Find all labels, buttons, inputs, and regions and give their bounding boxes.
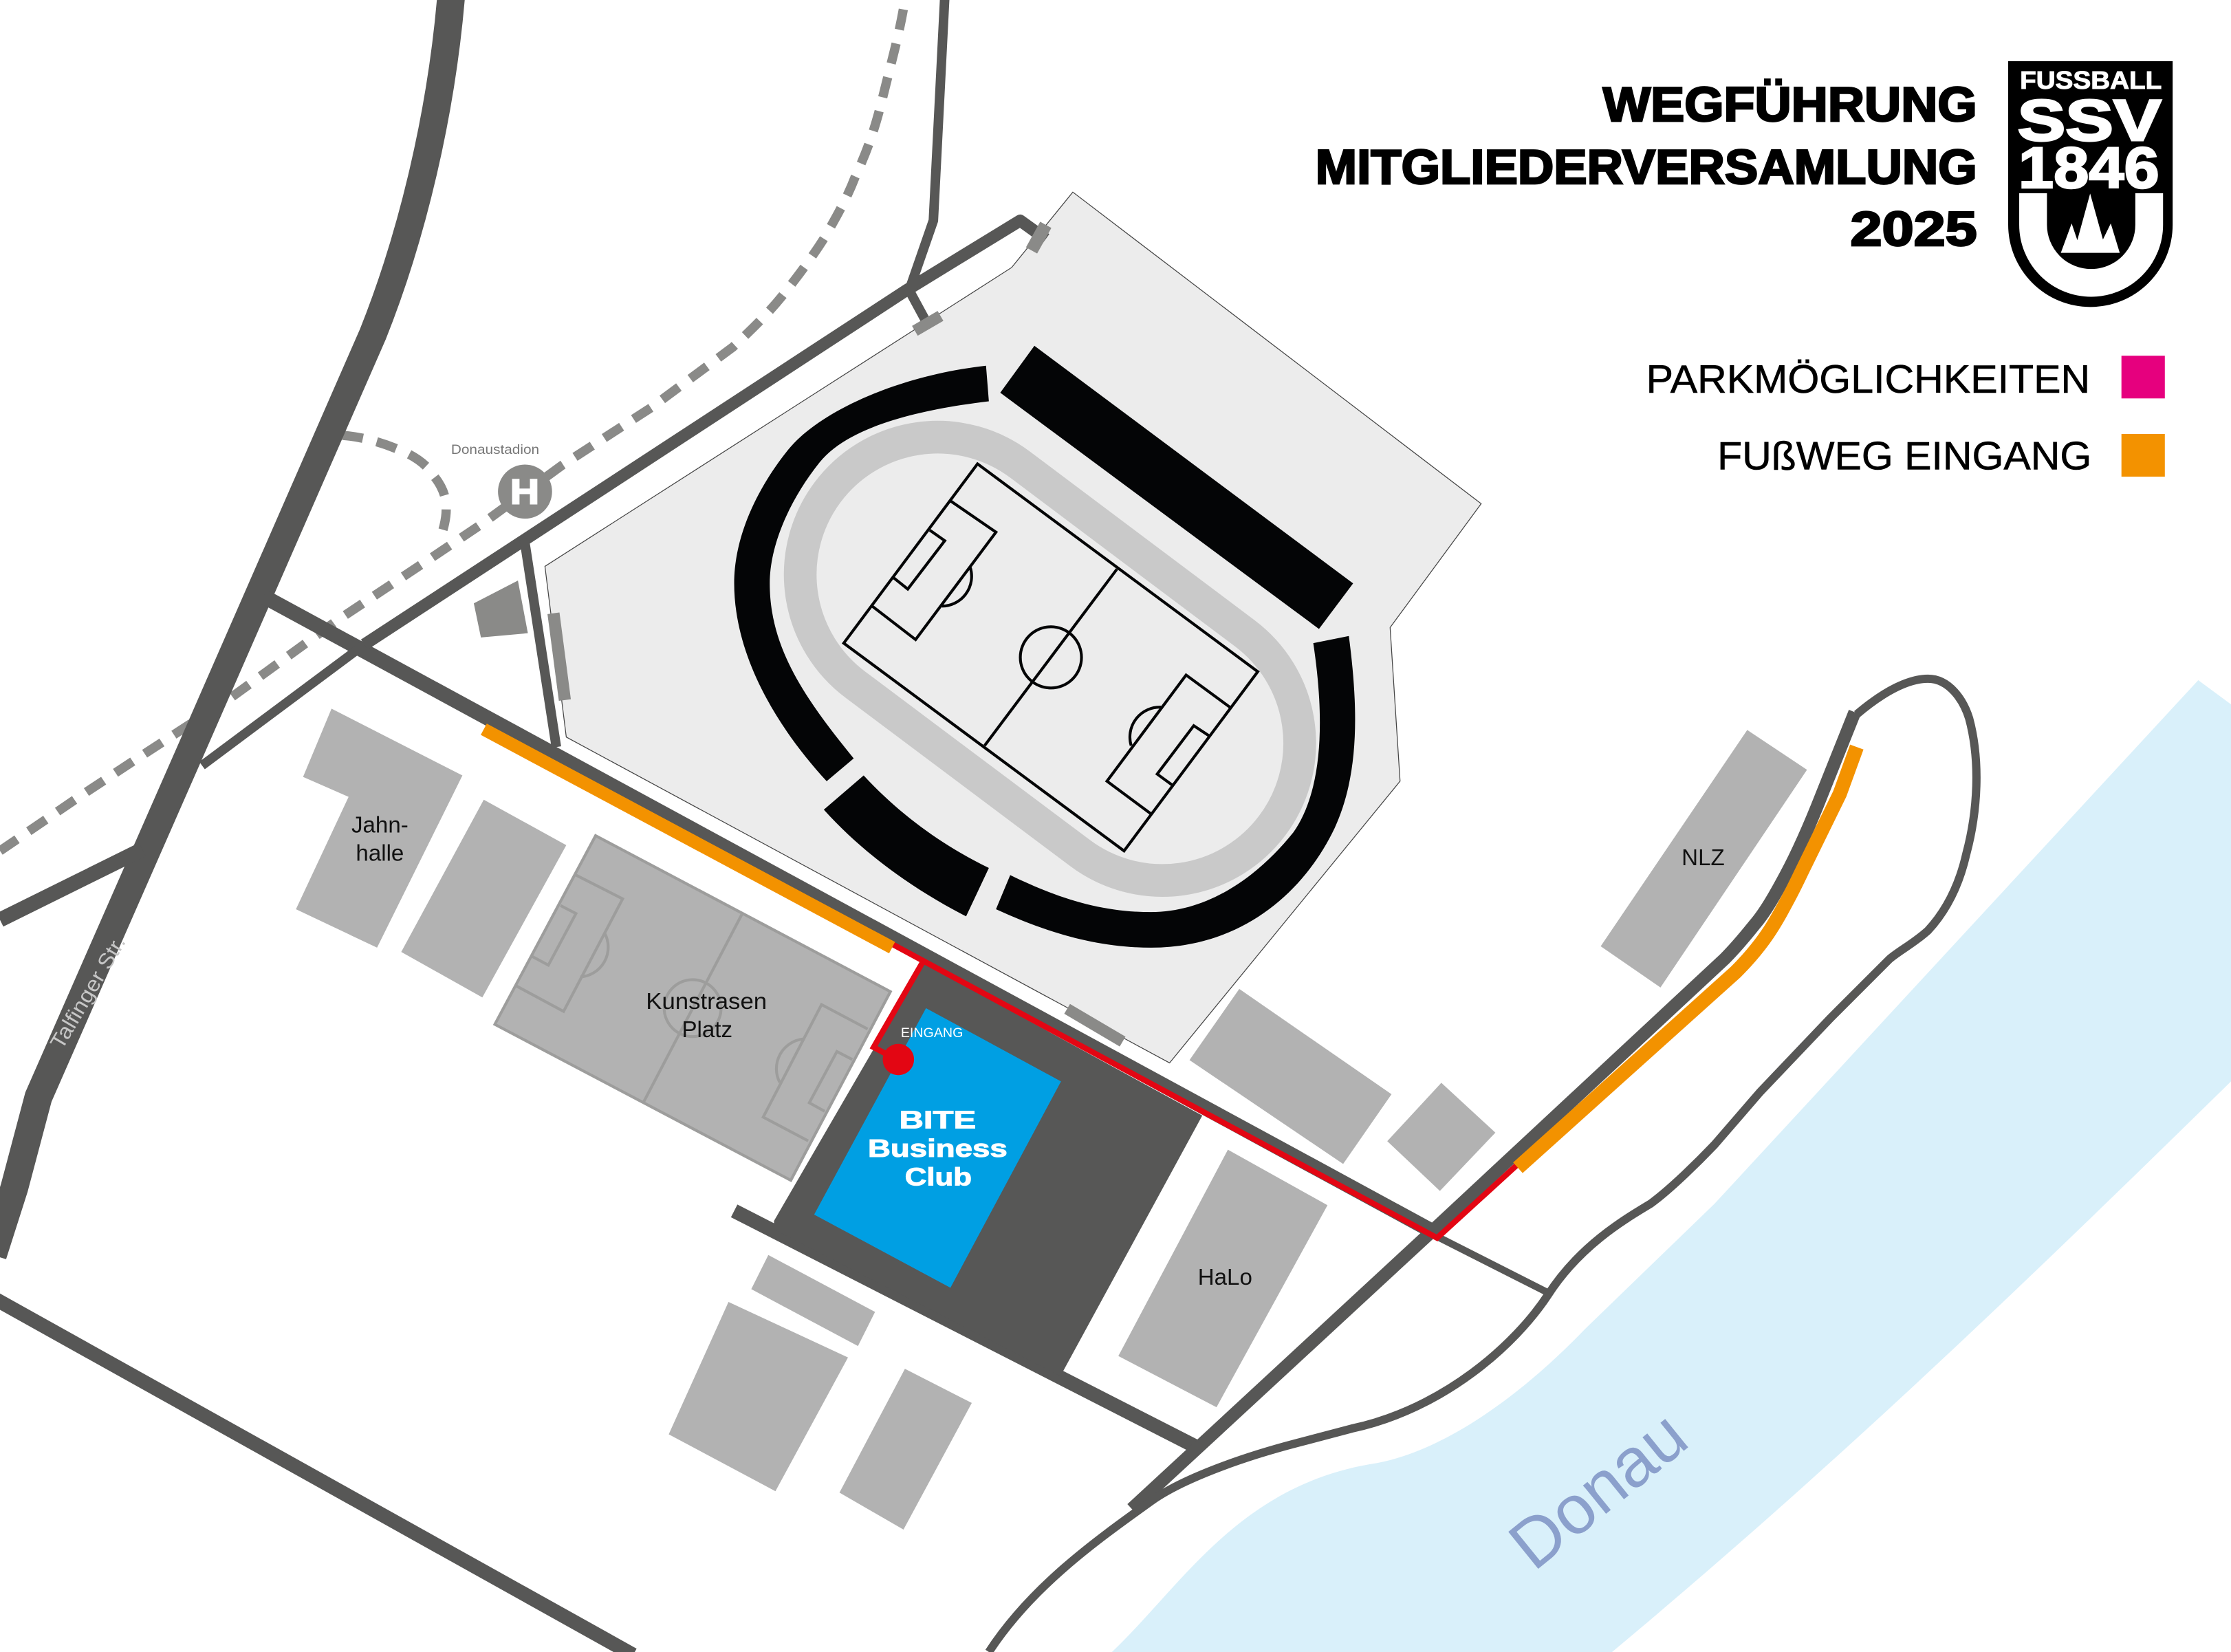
football pitch <box>844 464 1258 851</box>
running track <box>801 437 1300 880</box>
legend <box>1646 356 2165 479</box>
stadium ground <box>545 192 1481 1063</box>
label: Club: Club <box>905 1162 972 1191</box>
road: north-east lane upper <box>364 221 1046 644</box>
label: Kunstrasen: Kunstrasen <box>646 989 767 1014</box>
label: HaLo: HaLo <box>1198 1265 1252 1290</box>
walking route: orange segment to NLZ <box>1518 747 1857 1168</box>
label: Platz: Platz <box>682 1017 732 1043</box>
walking route: red path <box>893 945 1518 1238</box>
river: Donau <box>1112 680 2231 1652</box>
walking route: red entrance link <box>873 962 923 1060</box>
building: HaLo <box>1118 1150 1327 1407</box>
building: east of stadium gate <box>1190 989 1391 1164</box>
road: north lane <box>909 0 945 325</box>
H glyph: H <box>510 472 539 511</box>
penalty area: north <box>872 501 996 640</box>
pitch outline <box>844 464 1258 851</box>
walking route: orange segment along stadium road <box>483 729 892 948</box>
building: diamond <box>1387 1083 1495 1191</box>
building: south east <box>840 1369 972 1530</box>
pitch: Kunstrasen Platz <box>495 836 891 1180</box>
stand: main straight <box>1000 346 1353 629</box>
road: west branch <box>0 849 142 920</box>
legend swatch: parking <box>2122 356 2165 398</box>
road: Talfinger Str <box>0 0 451 1255</box>
penalty arc: north <box>942 567 972 606</box>
stadium <box>734 346 1355 948</box>
title line 2: MITGLIEDERVERSAMLUNG <box>1316 140 1977 194</box>
road: riverside loop <box>989 679 1977 1652</box>
logo U <box>2033 193 2149 283</box>
legend label: footpath: FUßWEG EINGANG <box>1717 435 2091 479</box>
road: north-east lane lower <box>202 644 364 765</box>
goal area: south <box>1157 726 1209 785</box>
road: to river path <box>1437 1237 1547 1292</box>
road: diagonal past pitches <box>263 596 1434 1232</box>
road: south-west long <box>0 1298 633 1652</box>
building: NLZ <box>1600 730 1807 988</box>
centre circle <box>1021 627 1082 688</box>
road: south of BITE <box>734 1211 1199 1448</box>
river label: Donau <box>1495 1396 1701 1584</box>
label: BITE: BITE <box>900 1106 976 1134</box>
entrance marker <box>883 1044 914 1075</box>
title line 3: 2025 <box>1851 202 1977 256</box>
building: next to Jahnhalle <box>401 800 566 997</box>
shield <box>2008 61 2173 307</box>
legend swatch: footpath <box>2122 434 2165 477</box>
blue building <box>814 1008 1061 1287</box>
logo text: SSV: SSV <box>2018 87 2162 153</box>
dashed path: loop <box>342 435 446 542</box>
stand: east curve <box>996 636 1355 948</box>
building: south small <box>751 1255 875 1346</box>
bus stop icon <box>498 465 552 519</box>
logo text: 1846: 1846 <box>2018 135 2159 200</box>
artificial turf surface <box>495 836 891 1180</box>
logo: SSV 1846 Fussball <box>2008 61 2173 307</box>
label: EINGANG: EINGANG <box>901 1025 963 1041</box>
road: from south to NLZ <box>1132 712 1855 1509</box>
label: Jahnhalle: Jahn- <box>351 812 409 838</box>
BITE Business Club building <box>814 1008 1061 1287</box>
halfway line <box>985 569 1117 746</box>
building: south large <box>668 1302 848 1491</box>
goal area: north <box>893 530 945 589</box>
label: Jahnhalle: halle <box>356 841 404 867</box>
gate: south <box>1067 1009 1122 1041</box>
title <box>1316 77 1977 256</box>
title line 1: WEGFÜHRUNG <box>1603 77 1977 131</box>
stop circle <box>498 465 552 519</box>
label: Business: Business <box>868 1134 1008 1162</box>
road: stadium west access <box>524 539 556 747</box>
legend label: parking: PARKMÖGLICHKEITEN <box>1646 358 2090 402</box>
turf pitch markings <box>516 875 868 1141</box>
logo text: FUSSBALL: FUSSBALL <box>2020 66 2162 94</box>
gate: north-east <box>1032 225 1046 250</box>
walking and cycling paths <box>0 0 905 851</box>
stand: south-west block <box>824 776 989 916</box>
dashed path: main <box>0 0 905 851</box>
dark hall block <box>774 964 1202 1378</box>
label: Donaustadion: Donaustadion <box>451 442 539 457</box>
gate: west <box>554 613 565 700</box>
penalty arc: south <box>1130 707 1161 746</box>
stand: west curve <box>734 366 989 781</box>
gate: north <box>915 316 941 331</box>
small building near stadium <box>474 580 528 638</box>
street label: Talfinger Str.: Talfinger Str. <box>45 932 131 1053</box>
penalty area: south <box>1107 675 1230 814</box>
label: NLZ: NLZ <box>1682 845 1725 871</box>
building: Jahnhalle <box>296 708 462 948</box>
logo cathedral <box>2061 193 2120 253</box>
